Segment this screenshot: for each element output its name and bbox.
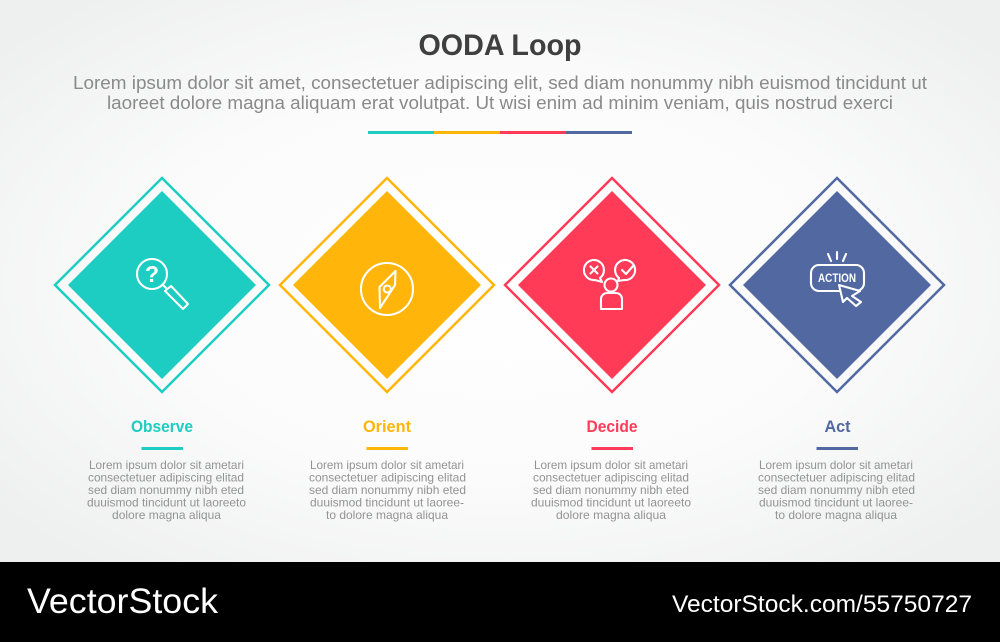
text block: orient: Orient <box>363 418 411 436</box>
text block: orient: to dolore magna aliqua <box>326 508 448 522</box>
text block: act: Lorem ipsum dolor sit ametari <box>759 458 913 472</box>
icon: person choosing <box>584 260 635 309</box>
text block: observe: sed diam nonummy nibh eted <box>88 483 244 497</box>
text block: observe: duuismod tincidunt ut laoreeto <box>87 496 246 510</box>
icon: action button with cursor: ACTION <box>818 273 856 285</box>
icon: compass <box>361 263 413 315</box>
title: OODA Loop <box>418 29 582 62</box>
text block: orient <box>309 418 466 522</box>
panel: observe diamond <box>55 178 269 392</box>
subtitle <box>73 72 927 113</box>
text block: act: consectetuer adipiscing elitad <box>758 470 915 484</box>
footer band <box>0 562 1000 642</box>
text block: orient: sed diam nonummy nibh eted <box>309 483 466 497</box>
text block: act: duuismod tincidunt ut laoree- <box>759 496 913 510</box>
text block: decide: duuismod tincidunt ut laoreeto <box>531 496 691 510</box>
subtitle: Lorem ipsum dolor sit amet, consectetuer adipiscing elit, sed diam nonummy nibh euismod tincidunt ut <box>73 72 927 93</box>
text block: observe: Lorem ipsum dolor sit ametari <box>89 458 244 472</box>
text block: act: sed diam nonummy nibh eted <box>758 483 915 497</box>
text block: decide: consectetuer adipiscing elitad <box>533 470 689 484</box>
text block: orient: Lorem ipsum dolor sit ametari <box>310 458 464 472</box>
text block: orient: consectetuer adipiscing elitad <box>309 470 466 484</box>
panel: decide diamond <box>505 178 719 392</box>
text block: act <box>758 418 915 522</box>
text block: act: to dolore magna aliqua <box>775 508 897 522</box>
footer logo: VectorStock <box>27 582 219 621</box>
text block: decide: dolore magna aliqua <box>556 508 666 522</box>
text block: observe: consectetuer adipiscing elitad <box>88 470 244 484</box>
text block: decide: Lorem ipsum dolor sit ametari <box>534 458 688 472</box>
text block: decide: Decide <box>586 418 638 436</box>
footer url: VectorStock.com/55750727 <box>672 591 972 618</box>
text block: act: Act <box>824 418 851 436</box>
panel: act diamond <box>730 178 944 392</box>
subtitle: laoreet dolore magna aliquam erat volutpat. Ut wisi enim ad minim veniam, quis nostrud exerci <box>107 92 893 113</box>
text block: orient: duuismod tincidunt ut laoree- <box>310 496 464 510</box>
text block: decide: sed diam nonummy nibh eted <box>533 483 689 497</box>
text block: decide <box>531 418 691 522</box>
icon: action button with cursor <box>811 252 864 306</box>
panel: orient diamond <box>280 178 494 392</box>
text block: observe: Observe <box>131 418 193 436</box>
icon: magnifier with question mark <box>137 259 188 309</box>
icon: magnifier with question mark: ? <box>145 261 159 287</box>
title divider bar <box>368 131 632 134</box>
text block: observe <box>87 418 246 522</box>
text block: observe: dolore magna aliqua <box>112 508 221 522</box>
